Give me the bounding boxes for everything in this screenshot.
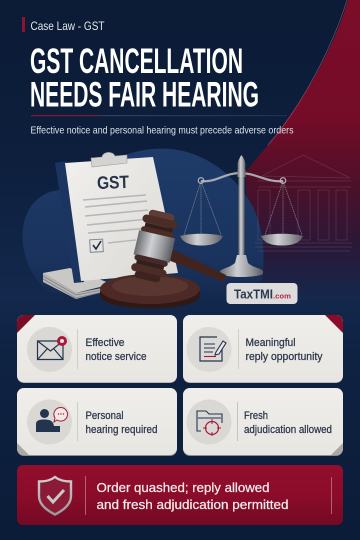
adjudication text: adjudication allowed (244, 424, 332, 436)
notice text: notice service (86, 351, 146, 363)
gavel handle (168, 249, 226, 282)
hearing text: hearing required (86, 424, 158, 436)
category label (22, 17, 105, 33)
notice text: Effective (86, 337, 124, 349)
reply text: Meaningful (246, 337, 296, 349)
conclusion text: and fresh adjudication permitted (96, 497, 288, 512)
red curved backdrop (245, 0, 360, 300)
scale pans (180, 234, 223, 246)
icon: clipboard document (55, 152, 178, 283)
hearing icon (27, 400, 72, 444)
scale beam (201, 173, 283, 181)
TaxTMI badge: TaxTMI (234, 286, 273, 302)
title rule (31, 115, 287, 116)
backdrop blob (22, 149, 264, 296)
card: effective notice (17, 315, 177, 383)
conclusion banner (17, 465, 343, 525)
reply text (246, 337, 323, 363)
card: fresh adjudication (183, 388, 343, 456)
courthouse outline (255, 155, 352, 251)
GST label: GST (97, 172, 129, 193)
reply text: reply opportunity (246, 351, 323, 363)
scale column (238, 176, 244, 256)
card: personal hearing (17, 388, 177, 456)
icon: gavel (100, 208, 226, 308)
adjudication icon (186, 400, 232, 444)
card: meaningful reply (183, 315, 343, 383)
checkbox (90, 239, 103, 252)
icon: shield check (39, 477, 71, 514)
TaxTMI badge: .com (273, 292, 291, 300)
title (30, 41, 259, 114)
hearing text: Personal (86, 410, 124, 422)
category label: Case Law - GST (30, 19, 105, 33)
hearing text (86, 410, 158, 436)
TaxTMI badge (226, 283, 298, 304)
adjudication text: Fresh (244, 410, 268, 422)
subtitle: Effective notice and personal hearing must precede adverse orders (30, 124, 294, 136)
notice icon (27, 327, 72, 372)
conclusion text: Order quashed; reply allowed (96, 480, 270, 495)
adjudication text (244, 410, 332, 436)
icon: paper stack (43, 268, 112, 299)
conclusion text (96, 480, 288, 512)
icon: balance scale (180, 155, 303, 277)
clipboard clip (91, 152, 127, 167)
gavel head (129, 208, 180, 284)
reply icon (186, 327, 232, 372)
gavel sound block (100, 274, 200, 308)
scale chains (184, 181, 302, 235)
notice text (86, 337, 146, 363)
